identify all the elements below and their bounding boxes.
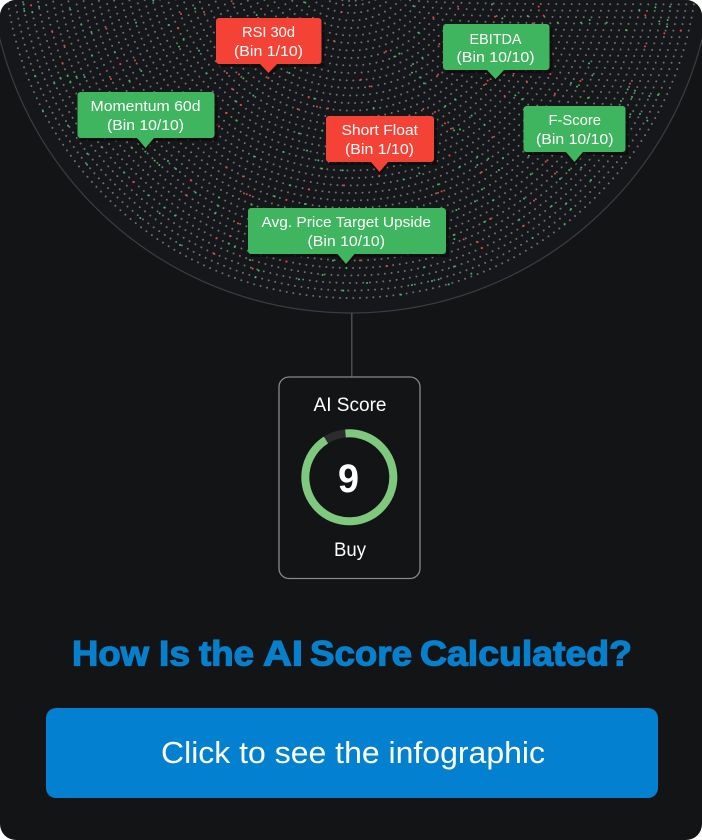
tag: F-Score: F-Score xyxy=(548,112,601,129)
tag: Momentum 60d: Momentum 60d xyxy=(90,98,200,115)
tag: EBITDA xyxy=(443,24,552,82)
heading: AI xyxy=(263,634,303,674)
tag: Short Float: (Bin 1/10) xyxy=(345,141,414,158)
button: Click to see the infographic xyxy=(161,735,545,770)
tag: RSI 30d: (Bin 1/10) xyxy=(234,43,303,60)
dotted semicircle chart xyxy=(0,0,702,313)
tag: Short Float: Short Float xyxy=(342,122,419,139)
tag: RSI 30d: RSI 30d xyxy=(242,24,295,41)
score ring xyxy=(302,430,397,525)
tag: Avg. Price Target Upside xyxy=(248,208,449,267)
button xyxy=(46,708,658,798)
score value: 9 xyxy=(338,457,359,501)
tag: RSI 30d xyxy=(216,18,324,76)
rating label: Buy xyxy=(334,540,366,561)
card title: AI Score xyxy=(314,395,386,416)
heading: the xyxy=(199,634,254,674)
tag: Momentum 60d: (Bin 10/10) xyxy=(107,117,184,134)
tag: F-Score xyxy=(524,106,628,165)
heading xyxy=(74,639,630,666)
tag: Avg. Price Target Upside: Avg. Price Target Upside xyxy=(262,214,431,231)
connector line xyxy=(351,313,352,377)
heading: How xyxy=(72,634,150,674)
heading: Calculated? xyxy=(420,634,632,674)
heading: Is xyxy=(159,634,190,674)
tag: F-Score: (Bin 10/10) xyxy=(536,131,614,148)
tag: Avg. Price Target Upside: (Bin 10/10) xyxy=(308,233,385,250)
tag: Momentum 60d xyxy=(78,92,218,151)
AI Score card xyxy=(279,377,420,578)
tag: EBITDA: EBITDA xyxy=(470,31,522,48)
tag: EBITDA: (Bin 10/10) xyxy=(456,49,535,66)
heading: Score xyxy=(310,634,412,674)
tag: Short Float xyxy=(326,116,437,175)
